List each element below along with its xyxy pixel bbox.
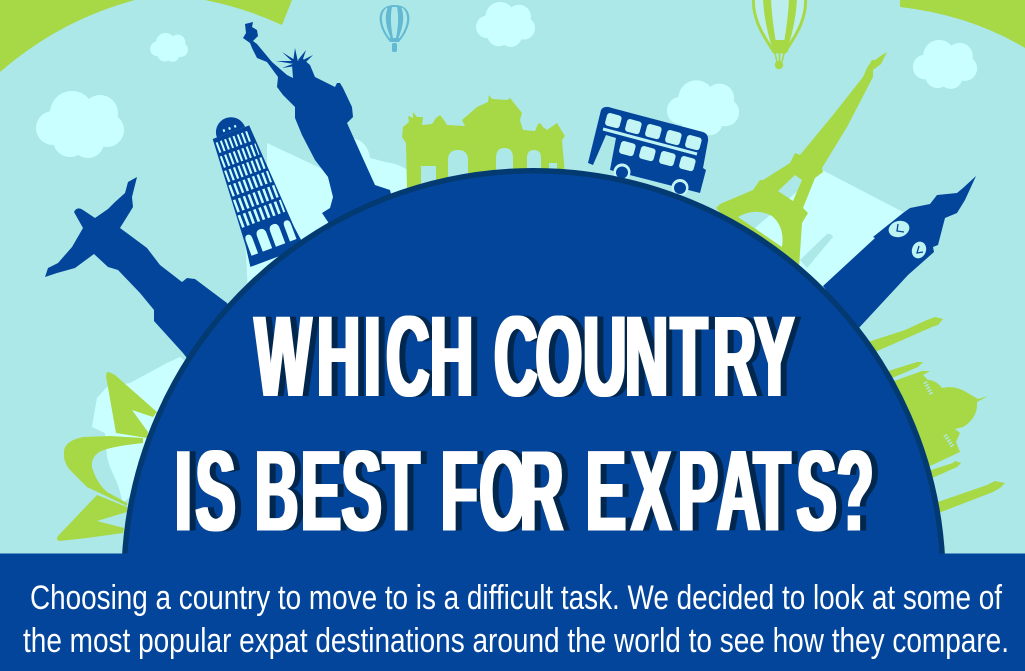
cloud: top centre — [476, 2, 535, 47]
title — [175, 293, 873, 556]
cloud: top right — [913, 40, 977, 89]
monument: Puerta de Alcala gate — [402, 95, 565, 190]
dome — [124, 171, 942, 560]
monument: Statue of Liberty — [243, 22, 395, 225]
balloon: blue — [380, 5, 409, 52]
monument: leaning tower of Pisa — [199, 108, 305, 267]
pale rocket silhouette — [800, 234, 833, 268]
monument: Taj Mahal — [865, 317, 1005, 514]
pale backdrop: behind lotus — [92, 357, 190, 503]
title: IS BEST FOR EXPATS? — [175, 428, 873, 556]
balloon: green — [753, 0, 806, 69]
cloud: small left — [150, 33, 188, 62]
monument: lotus temple — [57, 372, 157, 541]
monument: Christ the Redeemer — [45, 177, 240, 362]
cloud: behind bus — [667, 80, 739, 135]
monument: Eiffel Tower — [716, 52, 887, 268]
pale backdrop: behind gate — [345, 138, 410, 200]
pale backdrop: behind Eiffel and Big Ben — [755, 170, 905, 290]
monument: double-decker bus — [588, 107, 708, 196]
green corner: top left — [0, 0, 292, 72]
title: WHICH COUNTRY — [255, 293, 794, 421]
pale backdrop: behind tower and statue — [245, 143, 345, 292]
cloud: large left — [36, 91, 124, 158]
intro text — [23, 579, 1009, 660]
green corner: top right — [900, 0, 1025, 48]
monument: Big Ben — [823, 176, 976, 330]
bottom band — [0, 554, 1025, 671]
